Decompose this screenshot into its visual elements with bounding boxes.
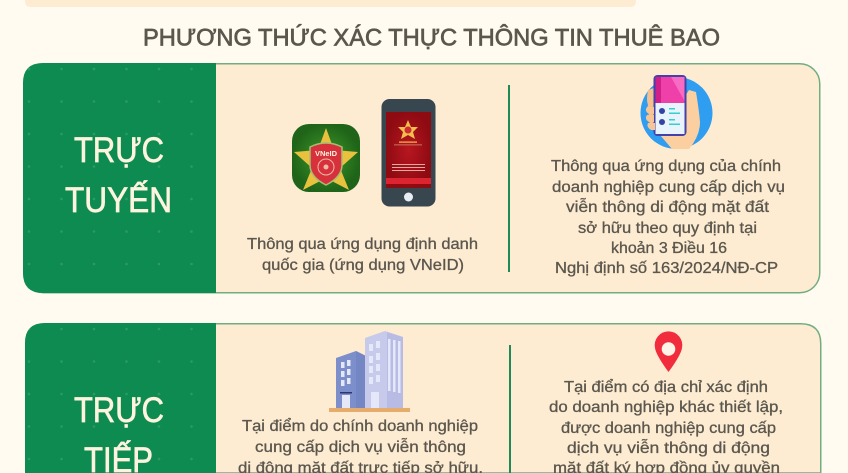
- panel: in-person verification: [25, 323, 821, 473]
- text: authorized point: [549, 378, 783, 473]
- text: carrier app method: khoản 3 Điều 16: [611, 240, 727, 257]
- panel: online verification: [23, 63, 820, 293]
- text: carrier-owned point: cung cấp dịch vụ viễn thông: [255, 437, 466, 456]
- panel heading block: online: [23, 63, 216, 293]
- text: carrier app method: [551, 158, 785, 277]
- text: VNeID method: quốc gia (ứng dụng VNeID): [262, 257, 464, 274]
- icon: phone with app screen: [382, 99, 436, 206]
- icon: hand holding phone: [640, 75, 712, 149]
- text: carrier app method: Nghị định số 163/2024/NĐ-CP: [555, 260, 778, 277]
- heading: TRỰC TUYẾN: TUYẾN: [65, 180, 172, 220]
- panel heading block: in person: [25, 323, 216, 473]
- heading: TRỰC TUYẾN: [65, 131, 172, 220]
- text: carrier-owned point: [238, 417, 483, 473]
- text: carrier app method: viễn thông di động mặt đất: [566, 197, 770, 216]
- text: authorized point: Tại điểm có địa chỉ xác định: [564, 378, 768, 396]
- icon: location pin: [655, 331, 682, 372]
- heading: TRỰC TIẾP: [74, 391, 164, 473]
- title: PHƯƠNG THỨC XÁC THỰC THÔNG TIN THUÊ BAO: [143, 24, 720, 52]
- heading: TRỰC TIẾP: TRỰC: [74, 391, 164, 430]
- text: authorized point: do doanh nghiệp khác thiết lập,: [549, 399, 783, 416]
- text: VNeID method: [247, 236, 478, 274]
- heading: TRỰC TUYẾN: TRỰC: [74, 131, 164, 170]
- text: carrier-owned point: Tại điểm do chính doanh nghiệp: [242, 417, 478, 435]
- icon: VNeID app: [292, 124, 360, 192]
- text: VNeID method: Thông qua ứng dụng định danh: [247, 236, 478, 253]
- text: authorized point: dịch vụ viễn thông di động: [567, 438, 770, 457]
- text: authorized point: được doanh nghiệp cung cấp: [561, 420, 776, 437]
- icon: VNeID app: VNeID: [315, 149, 338, 158]
- text: carrier app method: doanh nghiệp cung cấp dịch vụ: [552, 179, 785, 196]
- text: carrier app method: sở hữu theo quy định tại: [578, 220, 757, 237]
- panel: previous section remnant: [25, 0, 636, 7]
- text: carrier app method: Thông qua ứng dụng của chính: [551, 158, 781, 175]
- icon: office buildings: [329, 331, 410, 412]
